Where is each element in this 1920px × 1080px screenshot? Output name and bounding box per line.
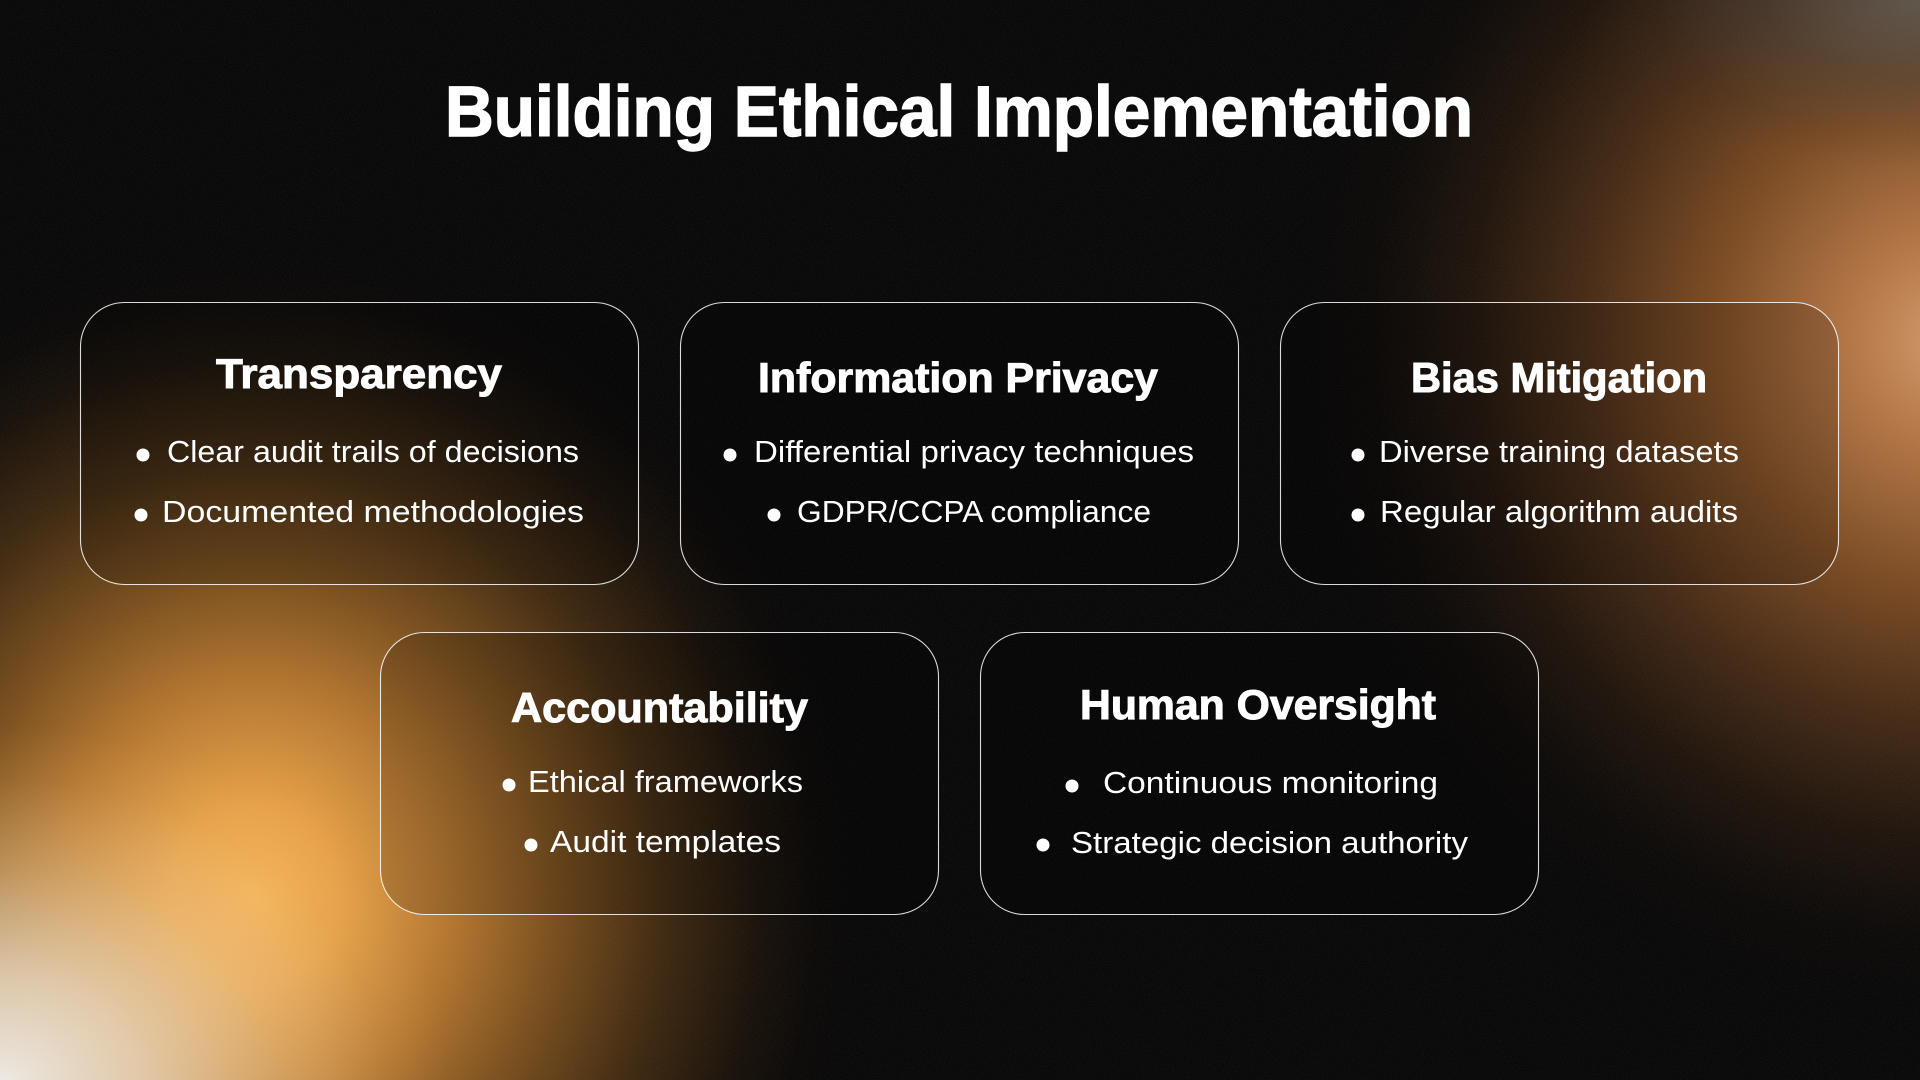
bullet: ethical frameworks: Ethical frameworks	[528, 764, 803, 799]
bullet: algorithm audits: Regular algorithm audits	[1380, 494, 1738, 529]
bullet: continuous monitoring: Continuous monitoring	[1103, 765, 1438, 800]
bullet: decision authority: Strategic decision authority	[1071, 825, 1469, 860]
bullet: diverse datasets: Diverse training datasets	[1379, 434, 1739, 469]
panel: Accountability	[380, 632, 938, 914]
bullet: compliance: GDPR/CCPA compliance	[797, 494, 1151, 529]
bullet: methodologies: Documented methodologies	[162, 494, 584, 529]
heading: Transparency: Transparency	[216, 350, 503, 397]
heading: Human Oversight: Human Oversight	[1080, 681, 1436, 728]
panel: Transparency	[80, 302, 638, 584]
heading: Bias Mitigation: Bias Mitigation	[1411, 354, 1707, 401]
bullet: audit trails: Clear audit trails of decisions	[167, 434, 579, 469]
bullet: differential privacy: Differential privacy techniques	[754, 434, 1194, 469]
bullet: audit templates: Audit templates	[550, 824, 781, 859]
title: Building Ethical Implementation	[445, 73, 1473, 152]
panel: Bias Mitigation	[1280, 302, 1838, 584]
heading: Accountability: Accountability	[511, 684, 809, 731]
panel: Human Oversight	[980, 632, 1538, 914]
panel: Information Privacy	[680, 302, 1238, 584]
heading: Information Privacy: Information Privacy	[758, 354, 1159, 401]
